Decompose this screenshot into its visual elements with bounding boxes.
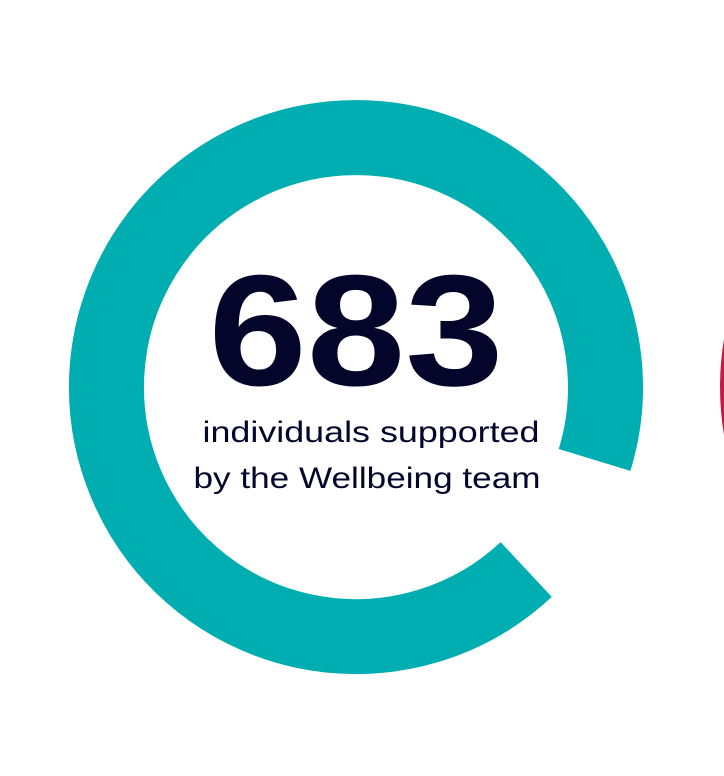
ring: next crimson ring (edge) bbox=[722, 100, 724, 674]
stat label bbox=[194, 416, 540, 495]
ring: teal progress arc bbox=[106, 138, 605, 637]
stat label: individuals supported bbox=[202, 416, 540, 449]
stat label: by the Wellbeing team bbox=[194, 462, 540, 495]
stat number: 683 bbox=[208, 243, 504, 419]
